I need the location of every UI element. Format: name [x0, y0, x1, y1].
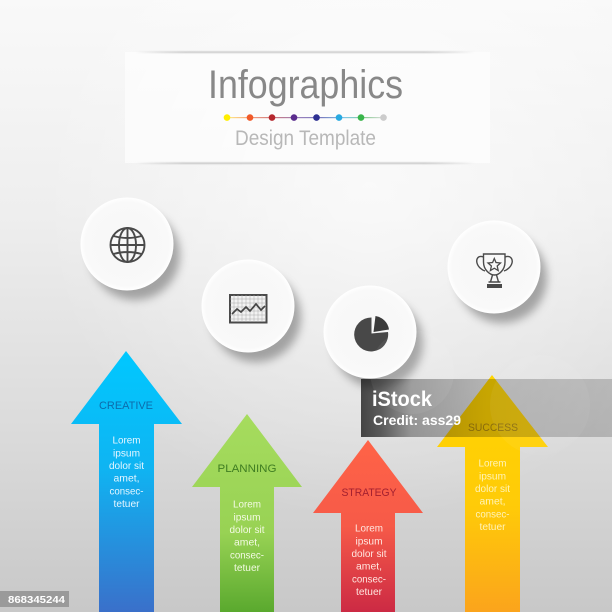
body text: planning: ipsum [234, 512, 261, 524]
icon circle: pie chart [324, 286, 423, 388]
icon: pie chart [354, 316, 389, 351]
body text: creative: consec- [110, 486, 144, 498]
body text: success: ipsum [479, 470, 506, 482]
icon: trophy [477, 254, 512, 288]
body text: creative: ipsum [113, 448, 140, 460]
body text: planning: Lorem [233, 498, 261, 510]
body text: creative: Lorem [112, 434, 141, 446]
body text: planning: tetuer [234, 562, 260, 574]
label: strategy: STRATEGY [342, 487, 397, 499]
body text: strategy: consec- [352, 574, 386, 586]
label: success: SUCCESS [468, 422, 518, 434]
icon: line chart [230, 295, 266, 322]
body text: strategy [352, 522, 387, 598]
body text: success: Lorem [478, 458, 507, 470]
body text: planning: amet, [234, 536, 260, 548]
body text: strategy: dolor sit [352, 548, 387, 560]
body text: planning: consec- [230, 550, 264, 562]
body text: planning: dolor sit [230, 524, 265, 536]
body text: creative: tetuer [114, 498, 140, 510]
arrow: planning [192, 414, 302, 612]
body text: strategy: Lorem [355, 522, 383, 534]
body text: success: consec- [476, 508, 510, 520]
body text: creative: dolor sit [109, 460, 144, 472]
icon circle: globe [80, 198, 180, 300]
icon circle: line chart [202, 260, 301, 362]
watermark brand: iStock [372, 388, 432, 411]
body text: success [475, 458, 510, 533]
body text: creative: amet, [114, 472, 140, 484]
panel: title card [125, 52, 490, 164]
arrow: success [437, 375, 548, 612]
body text: creative [109, 434, 144, 510]
body text: planning [230, 498, 265, 574]
image id tag [0, 591, 69, 607]
body text: success: amet, [480, 496, 506, 508]
label: creative: CREATIVE [99, 400, 153, 412]
arrow: creative [71, 351, 182, 612]
colored dot timeline [224, 114, 387, 121]
title: Infographics [208, 63, 403, 107]
body text: success: tetuer [480, 521, 506, 533]
icon circle: trophy [448, 220, 547, 323]
body text: strategy: ipsum [356, 536, 383, 548]
watermark credit: Credit: ass29 [373, 412, 461, 428]
body text: success: dolor sit [475, 483, 510, 495]
body text: strategy: amet, [356, 560, 382, 572]
image id tag: 868345244 [8, 594, 65, 606]
body text: strategy: tetuer [356, 586, 382, 598]
watermark banner [361, 330, 612, 455]
arrow: strategy [313, 440, 423, 612]
label: planning: PLANNING [218, 463, 276, 475]
icon: globe [110, 228, 144, 262]
subtitle: Design Template [235, 127, 376, 150]
